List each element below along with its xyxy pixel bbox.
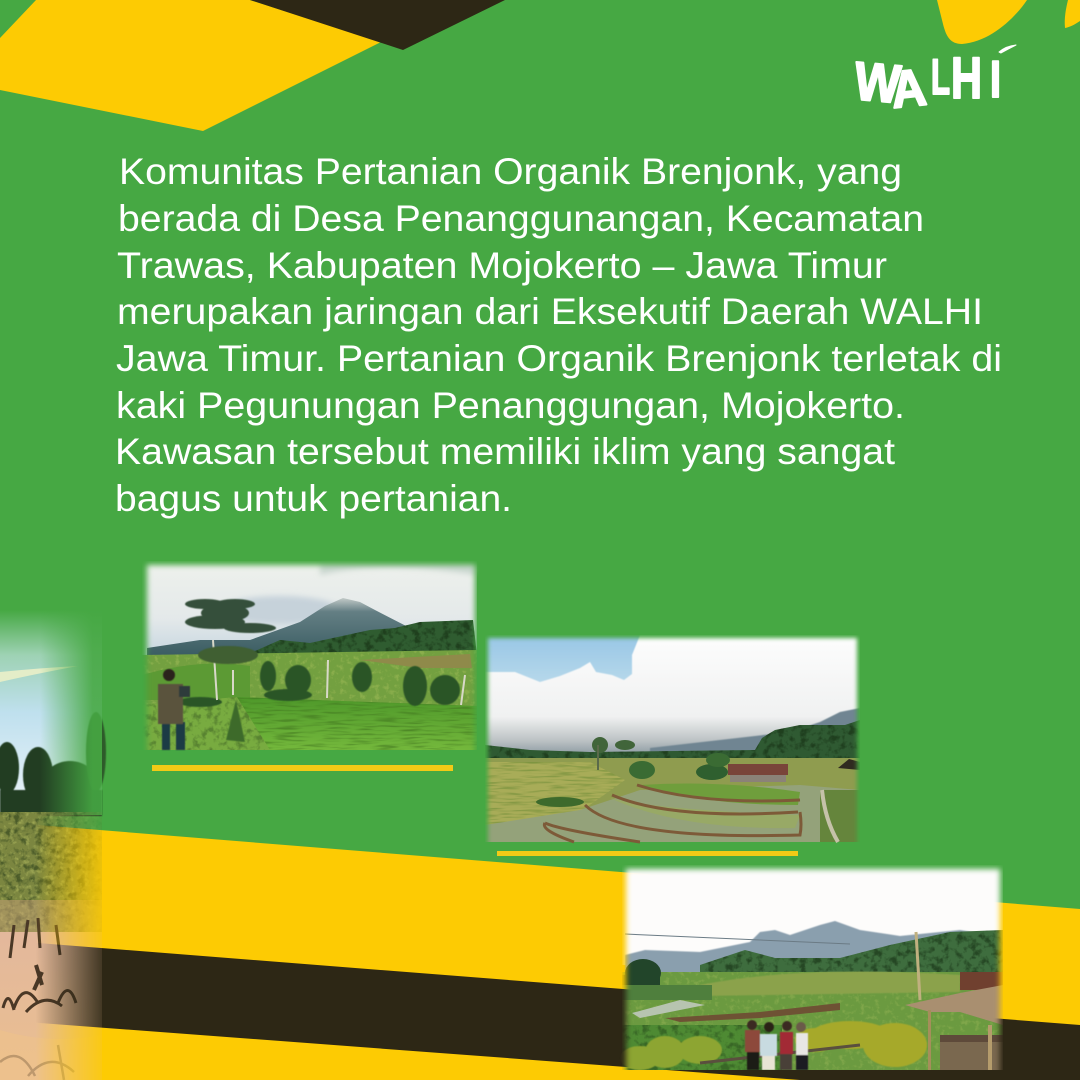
photo: mountain and rice fields (142, 561, 477, 750)
body text: Kawasan tersebut memiliki iklim yang sangat (115, 431, 895, 472)
body text: merupakan jaringan dari Eksekutif Daerah WALHI (117, 291, 983, 332)
bottom yellow band (0, 822, 1080, 1080)
top dark shape (250, 0, 505, 50)
body text: bagus untuk pertanian. (115, 478, 512, 519)
logo: WALHI: I (990, 51, 1001, 109)
bottom dark band (0, 940, 1080, 1080)
body text: berada di Desa Penanggunangan, Kecamatan (118, 198, 924, 239)
logo: WALHI: W (852, 51, 903, 115)
logo: WALHI: L (931, 49, 950, 105)
photo: terraced rice fields (485, 635, 860, 842)
photo: village fields with farmers (620, 865, 1003, 1072)
top-right yellow shapes (937, 0, 1080, 44)
body text: Trawas, Kabupaten Mojokerto – Jawa Timur (117, 245, 887, 286)
yellow rule under second photo (497, 851, 798, 856)
logo: WALHI: H (951, 46, 982, 111)
body text: Komunitas Pertanian Organik Brenjonk, yang (119, 151, 902, 192)
body text: Jawa Timur. Pertanian Organik Brenjonk terletak di (116, 338, 1002, 379)
body text: kaki Pegunungan Penanggungan, Mojokerto. (116, 385, 905, 426)
yellow rule under first photo (152, 765, 453, 771)
left edge photo: flooded corn field (0, 610, 106, 1080)
logo: WALHI: A (888, 59, 929, 120)
top-left yellow shape (0, 0, 381, 131)
body text (115, 151, 1002, 519)
logo: WALHI (852, 45, 1016, 120)
